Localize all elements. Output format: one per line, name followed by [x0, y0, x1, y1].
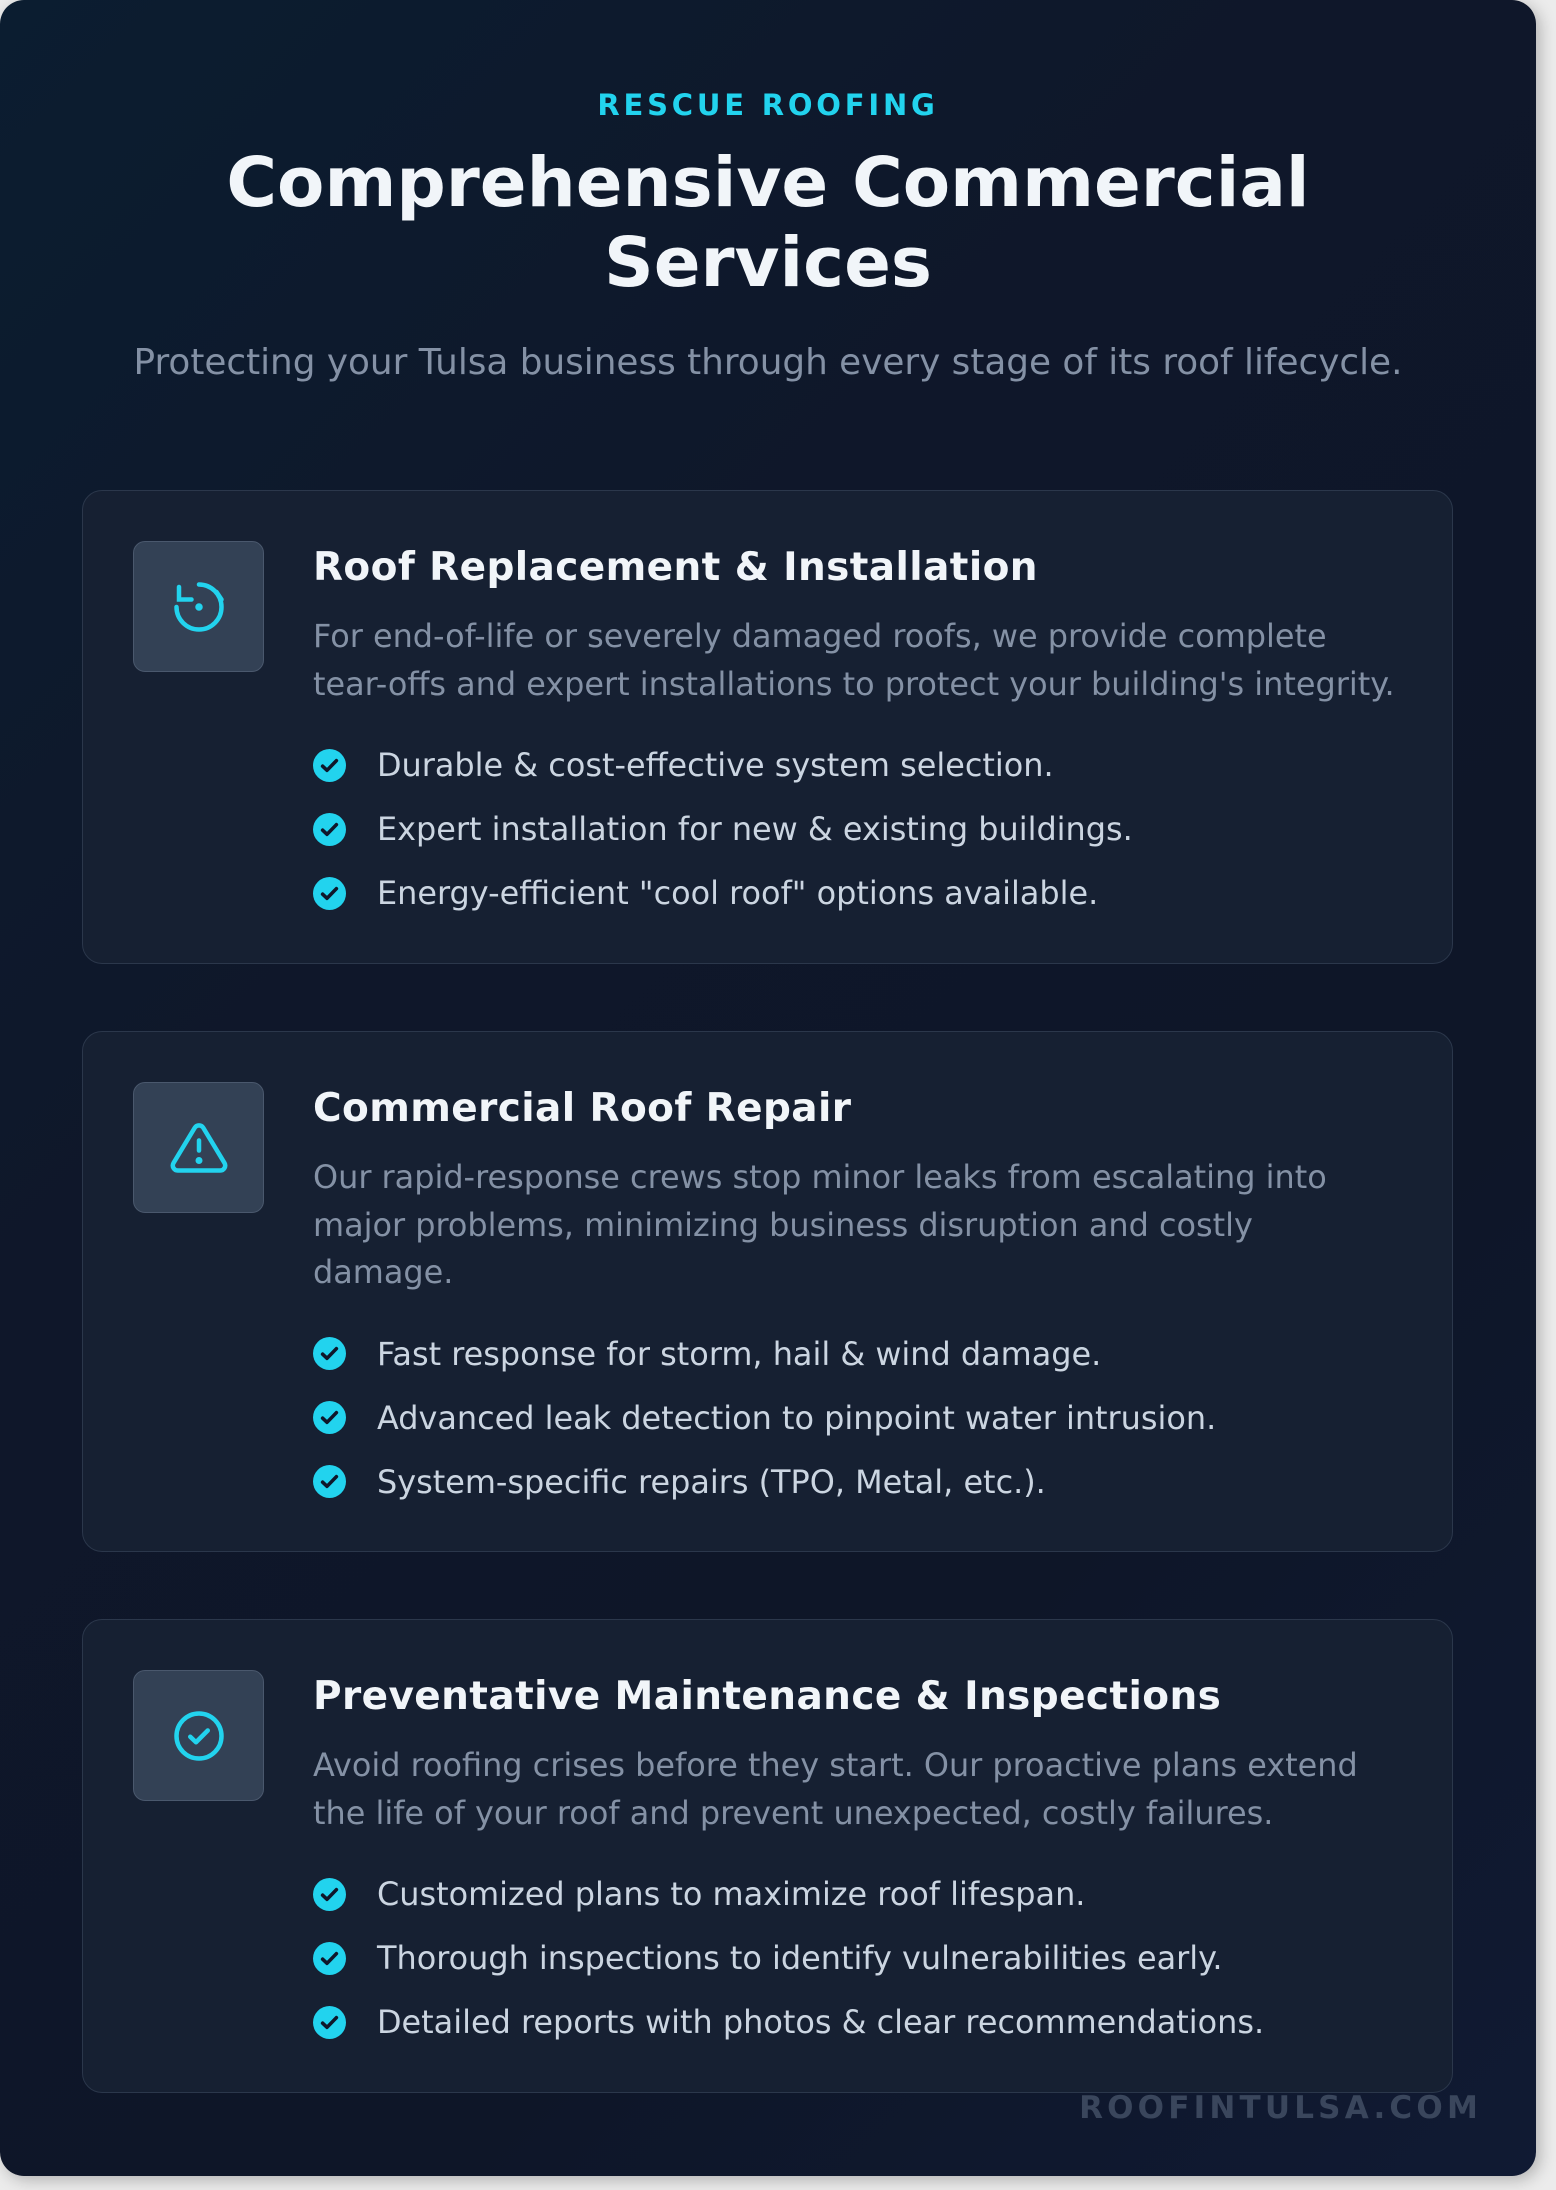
- title: [226, 143, 1310, 303]
- description: Avoid roofing crises before they start. Our proactive plans extend: [313, 1746, 1358, 1784]
- description: [313, 617, 1395, 702]
- title: Comprehensive Commercial: [226, 143, 1310, 223]
- bullet list: System-specific repairs (TPO, Metal, etc.).: [377, 1462, 1046, 1500]
- heading: Roof Replacement & Installation: [313, 545, 1038, 590]
- heading: Commercial Roof Repair: [313, 1086, 851, 1131]
- panel: roof replacement: [82, 490, 1453, 964]
- description: damage.: [313, 1253, 453, 1291]
- bullet list: [313, 1875, 1264, 2041]
- icon: check circle: [133, 1670, 264, 1801]
- subtitle: Protecting your Tulsa business through every stage of its roof lifecycle.: [134, 342, 1402, 383]
- bullet list: Expert installation for new & existing buildings.: [377, 810, 1133, 848]
- bullet list: Thorough inspections to identify vulnerabilities early.: [377, 1939, 1223, 1977]
- bullet list: Customized plans to maximize roof lifespan.: [377, 1875, 1085, 1913]
- footer url: ROOFINTULSA.COM: [1079, 2090, 1482, 2126]
- bullet list: Fast response for storm, hail & wind damage.: [377, 1334, 1101, 1372]
- bullet list: Detailed reports with photos & clear recommendations.: [377, 2003, 1264, 2041]
- description: [313, 1158, 1327, 1291]
- bullet list: Energy-efficient "cool roof" options available.: [377, 874, 1098, 912]
- description: Our rapid-response crews stop minor leaks from escalating into: [313, 1158, 1327, 1196]
- icon: warning: [133, 1082, 264, 1213]
- bullet list: Durable & cost-effective system selection.: [377, 746, 1054, 784]
- heading: Preventative Maintenance & Inspections: [313, 1674, 1221, 1719]
- description: [313, 1746, 1358, 1832]
- bullet list: [313, 1334, 1216, 1500]
- panel: roof repair: [82, 1031, 1453, 1552]
- description: For end-of-life or severely damaged roofs, we provide complete: [313, 617, 1327, 655]
- panel: maintenance: [82, 1619, 1453, 2093]
- eyebrow: RESCUE ROOFING: [597, 88, 939, 122]
- bullet list: Advanced leak detection to pinpoint water intrusion.: [377, 1398, 1216, 1436]
- description: major problems, minimizing business disruption and costly: [313, 1206, 1253, 1244]
- icon: refresh clock: [133, 541, 264, 672]
- title: Services: [604, 223, 932, 303]
- bullet list: [313, 746, 1133, 912]
- description: the life of your roof and prevent unexpected, costly failures.: [313, 1794, 1273, 1832]
- description: tear-offs and expert installations to protect your building's integrity.: [313, 664, 1395, 702]
